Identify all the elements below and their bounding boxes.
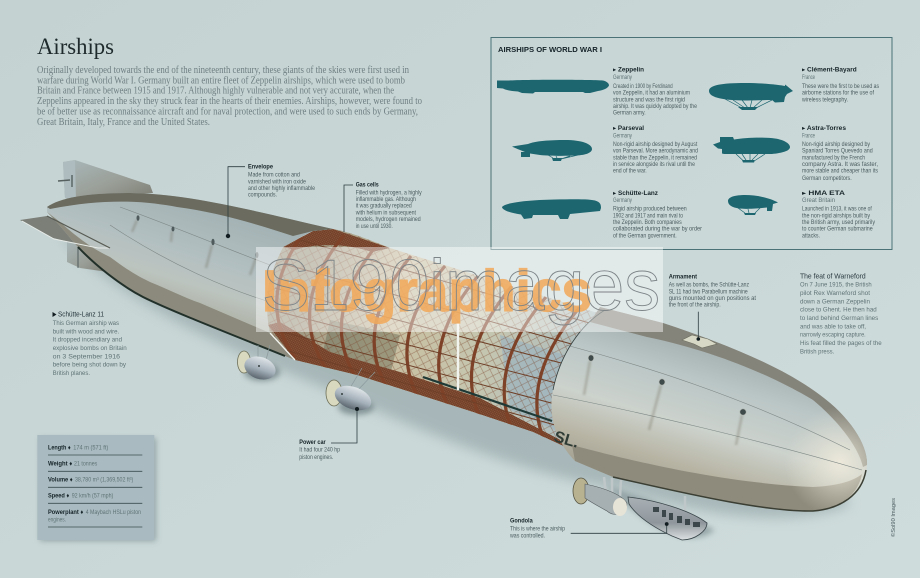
entry: Astra-Torres: France: [802, 132, 815, 139]
envelope: nose section: [551, 307, 867, 511]
spec: volume: Volume ♦: [48, 477, 73, 484]
spec: weight: Weight ♦: [48, 461, 72, 468]
entry: Zeppelin: von Zeppelin, it had an aluminium: [613, 90, 690, 97]
silhouette: Clément-Bayard: [709, 83, 793, 110]
spec: length: Length ♦: [48, 445, 71, 452]
entry: Astra-Torres: Spaniard Torres Quevedo and: [802, 148, 873, 155]
callout: Gas cells: Gas cells: [356, 182, 379, 189]
entry: Zeppelin: [613, 67, 697, 117]
callout: The feat of Warneford: On 7 June 1915, the British: [800, 282, 872, 289]
left stabiliser fin: [22, 216, 110, 248]
entry: Parseval: end of the war.: [613, 168, 647, 175]
silhouette: Astra-Torres: [713, 137, 790, 162]
entry: Parseval: [613, 125, 698, 175]
spec: powerplant: 4 Maybach HSLu piston: [86, 509, 141, 516]
callout: The feat of Warneford: British press.: [800, 348, 834, 355]
entry: Clément-Bayard: These were the first to be used as: [802, 83, 879, 90]
entry: Parseval: ▸ Parseval: [613, 125, 644, 132]
airship illustration: [20, 160, 867, 540]
callout: Armament: As well as bombs, the Schütte-Lanz: [669, 282, 749, 289]
entry: Schütte-Lanz: collaborated during the war by order: [613, 226, 703, 233]
callout: Gas cells: Filled with hydrogen, a highly: [356, 189, 422, 196]
entry: Clément-Bayard: wireless telegraphy.: [801, 96, 848, 103]
callout: Envelope: [226, 164, 315, 238]
callout: Gas cells: models, hydrogen remained: [356, 216, 421, 223]
watermark: S190images: [262, 246, 660, 326]
intro text block: Originally developed towards the end of the nineteenth century, these giants of the skies were first used in: [37, 65, 409, 76]
silhouette: HMA ETA: [728, 195, 778, 215]
entry: HMA ETA: Launched in 1913, it was one of: [802, 206, 872, 213]
entry: Zeppelin: Germany: [613, 74, 632, 81]
callout: Schütte-Lanz 11: It dropped incendiary and: [53, 337, 122, 344]
callout: Envelope: compounds.: [248, 192, 277, 199]
power car: centre: [326, 368, 375, 415]
entry: HMA ETA: ▸ HMA ETA: [802, 190, 846, 197]
panel heading: AIRSHIPS OF WORLD WAR I: [498, 45, 602, 54]
callout: Envelope: and other highly inflammable: [248, 185, 315, 192]
entry: Zeppelin: Created in 1900 by Ferdinand: [613, 83, 673, 90]
entry: Parseval: stable than the Zeppelin, it remained: [613, 154, 697, 161]
entry: Astra-Torres: German competitors.: [802, 175, 852, 182]
callout: Armament: Armament: [669, 273, 697, 280]
entry: Zeppelin: ▸ Zeppelin: [613, 67, 644, 74]
callout: Gas cells: it was gradually replaced: [356, 203, 412, 210]
callout: Envelope: varnished with iron oxide: [248, 178, 306, 185]
entry: Astra-Torres: ▸ Astra-Torres: [802, 125, 847, 132]
spec: volume: 38,780 m³ (1,369,502 ft³): [75, 477, 133, 484]
lower band: [47, 212, 295, 360]
entry: Zeppelin: structure and was the first rigid: [613, 96, 685, 103]
callout: Schütte-Lanz 11: British planes.: [53, 370, 90, 377]
envelope: tail section: [22, 193, 333, 360]
spec: powerplant: engines.: [48, 516, 66, 523]
callout: Schütte-Lanz 11: before being shot down by: [53, 362, 127, 369]
entry: Schütte-Lanz: ▸ Schütte-Lanz: [613, 190, 658, 197]
spec: speed: 92 km/h (57 mph): [72, 493, 113, 500]
callout: Gondola: was controlled.: [509, 532, 545, 539]
intro text block: [37, 65, 422, 128]
top band: [47, 193, 333, 236]
callout: Armament: SL 11 had two Parabellum machine: [669, 288, 748, 295]
entry: Schütte-Lanz: Germany: [613, 197, 632, 204]
silhouette: Zeppelin: [497, 80, 609, 94]
entry: Zeppelin: German army.: [613, 110, 646, 117]
silhouette: Parseval: [512, 140, 592, 161]
entry: Parseval: Germany: [613, 132, 632, 139]
entry: Parseval: Non-rigid airship designed by August: [613, 141, 697, 148]
panel: specifications: [37, 435, 156, 541]
callout: Schütte-Lanz 11: Schütte-Lanz 11: [58, 310, 104, 319]
entry: Clément-Bayard: ▸ Clément-Bayard: [802, 67, 857, 74]
entry: HMA ETA: attacks.: [802, 232, 820, 239]
callout: The feat of Warneford: His feat filled the pages of the: [800, 340, 882, 347]
callout: Power car: [299, 407, 359, 461]
entry: Parseval: in service alongside its rival until the: [613, 161, 695, 168]
entry: Astra-Torres: [802, 125, 878, 182]
entry: Schütte-Lanz: the Zeppelin. Both companies: [613, 219, 682, 226]
callout: Schütte-Lanz 11: built with wood and wire.: [53, 328, 119, 335]
callout: The feat of Warneford: narrowly escaping capture.: [800, 332, 866, 339]
internal lattice: [267, 229, 596, 446]
callout: Power car: piston engines.: [299, 454, 333, 461]
gun platform: [682, 335, 717, 348]
callout: Envelope: Envelope: [248, 164, 274, 171]
entry: Astra-Torres: company Astra. It was faster,: [802, 161, 878, 168]
intro text block: be of better use as reconnaissance aircraft and for naval protection, and were used to such ends by Germany,: [37, 106, 418, 117]
callout: The feat of Warneford: close to Ghent. He then had: [800, 307, 877, 314]
entry: Astra-Torres: more stable and cheaper than its: [802, 168, 878, 175]
spec: weight: 21 tonnes: [74, 461, 98, 468]
callout: Armament: guns mounted on gun positions at: [669, 295, 756, 302]
entry: Schütte-Lanz: [613, 190, 703, 239]
callout: Gas cells: inflammable gas. Although: [356, 196, 416, 203]
callout: The feat of Warneford: pilot Rex Warneford shot: [800, 290, 870, 297]
image credit: ©Sol90 Images: [890, 498, 897, 537]
callout: Gondola: This is where the airship: [510, 526, 565, 533]
vent ports: [132, 215, 258, 275]
entry: HMA ETA: the non-rigid airships built by: [802, 212, 871, 219]
vent ports: [584, 355, 746, 445]
tail fins: [20, 160, 153, 272]
lower band: [572, 445, 862, 511]
silhouette: Schütte-Lanz: [502, 199, 601, 219]
callout: The feat of Warneford: to land behind German lines: [800, 315, 879, 322]
callout: Gondola: Gondola: [510, 518, 533, 525]
hull lettering: SL.: [552, 429, 581, 452]
callout: The feat of Warneford: down a German Zeppelin: [800, 298, 870, 305]
entry: Schütte-Lanz: 1902 and 1917 and main rival to: [613, 212, 683, 219]
callout: Schütte-Lanz 11: [52, 310, 127, 377]
top band: [590, 307, 867, 467]
spec: powerplant: [48, 509, 141, 523]
callout: The feat of Warneford: The feat of Warneford: [800, 271, 866, 280]
spec: speed: [48, 493, 113, 500]
intro text block: Britain and France between 1915 and 1917. Although highly vulnerable and not very accurate, when the: [37, 86, 394, 97]
spec: powerplant: Powerplant ♦: [48, 509, 83, 516]
ship shadow: [60, 235, 850, 518]
intro text block: Great Britain, Italy, France and the United States.: [37, 117, 210, 128]
title: Airships: [37, 34, 114, 59]
spec: volume: [48, 477, 133, 484]
gondola and rear power car: [573, 477, 715, 540]
callout: Envelope: Made from cotton and: [248, 172, 300, 179]
callout: Gas cells: [344, 182, 422, 232]
callout: Schütte-Lanz 11: on 3 September 1916: [53, 353, 120, 360]
callout: Power car: Power car: [299, 439, 326, 446]
entry: HMA ETA: Great Britain: [802, 197, 835, 204]
entry: HMA ETA: [802, 190, 876, 239]
spec: weight: [48, 461, 98, 468]
callout: Gondola: [509, 518, 669, 539]
intro text block: Zeppelins appeared in the sky they struck fear in the hearts of their enemies. Airships, however, were found to: [37, 96, 422, 107]
intro text block: warfare during World War I. Germany built an entire fleet of Zeppelin airships, which were used to bomb: [37, 75, 405, 86]
entry: Schütte-Lanz: of the German government.: [613, 232, 677, 239]
spec: length: [48, 445, 108, 452]
callout: Schütte-Lanz 11: This German airship was: [53, 320, 120, 327]
callout: Armament: the front of the airship.: [669, 302, 721, 309]
power car: left: [238, 345, 280, 383]
entry: Zeppelin: airship. It was quickly adopted by the: [613, 103, 697, 110]
callout: Gas cells: with helium in subsequent: [355, 209, 416, 216]
callout: Gas cells: in use until 1930.: [356, 223, 393, 230]
callout: The feat of Warneford: and was able to take off,: [800, 323, 866, 330]
entry: Clément-Bayard: France: [802, 74, 815, 81]
entry: Clément-Bayard: airborne stations for the use of: [802, 90, 874, 97]
entry: HMA ETA: to counter German submarine: [802, 226, 873, 233]
entry: Parseval: von Parseval. More aerodynamic and: [613, 148, 698, 155]
callout: Armament: [669, 273, 756, 341]
entry: Astra-Torres: Non-rigid airship designed by: [802, 141, 871, 148]
watermark: Infographics: [262, 259, 592, 324]
callout: Power car: It had four 240 hp: [299, 447, 340, 454]
spec: length: 174 m (571 ft): [73, 445, 108, 452]
callout: The feat of Warneford: [800, 271, 882, 355]
callout: Schütte-Lanz 11: explosive bombs on Britain: [53, 345, 127, 352]
entry: HMA ETA: the British army, used primarily: [802, 219, 876, 226]
panel: airships of World War I: [491, 38, 892, 250]
entry: Astra-Torres: manufactured by the French: [802, 154, 865, 161]
spec: speed: Speed ♦: [48, 493, 69, 500]
entry: Clément-Bayard: [801, 67, 879, 103]
entry: Schütte-Lanz: Rigid airship produced between: [613, 206, 687, 213]
